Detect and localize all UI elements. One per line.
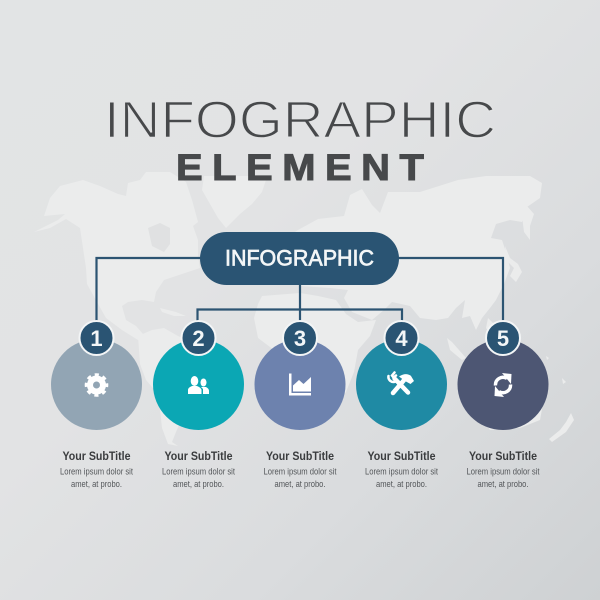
item 3: 3 <box>294 326 306 351</box>
item 5 <box>458 321 548 490</box>
map: Hudson Bay <box>148 223 170 252</box>
item 4 <box>356 321 447 490</box>
item 3: amet, at probo. <box>274 479 326 490</box>
item 4: Your SubTitle <box>368 449 436 463</box>
item 2: Your SubTitle <box>164 449 233 463</box>
connector lines <box>96 258 503 322</box>
icon: refresh <box>494 373 512 397</box>
item 1: 1 <box>90 326 103 351</box>
item 2: 2 <box>192 326 205 351</box>
icon: area chart <box>289 374 311 396</box>
item 1: Your SubTitle <box>62 449 131 463</box>
item 5: Your SubTitle <box>469 449 537 463</box>
heading pill: INFOGRAPHIC <box>225 246 374 270</box>
item 4: Lorem ipsum dolor sit <box>365 466 438 478</box>
item 3 <box>254 321 346 490</box>
item 3: Lorem ipsum dolor sit <box>264 466 337 478</box>
item 2 <box>153 321 244 490</box>
item 5: Lorem ipsum dolor sit <box>466 466 540 478</box>
item 1 <box>51 321 142 490</box>
item 2: Lorem ipsum dolor sit <box>162 466 235 478</box>
title: INFOGRAPHIC <box>104 92 496 150</box>
item 4: 4 <box>395 326 408 351</box>
title: ELEMENT <box>176 147 433 189</box>
item 3: Your SubTitle <box>266 449 334 463</box>
icon: people <box>188 376 209 394</box>
item 5: amet, at probo. <box>478 479 528 490</box>
title <box>104 92 496 189</box>
item 5: 5 <box>497 326 509 351</box>
world map <box>34 172 574 446</box>
item 4: amet, at probo. <box>376 479 427 490</box>
item 1: amet, at probo. <box>71 479 122 490</box>
heading pill <box>200 232 399 285</box>
item 1: Lorem ipsum dolor sit <box>60 466 133 478</box>
item 2: amet, at probo. <box>173 479 224 490</box>
icon: gear <box>86 375 106 395</box>
icon: tools <box>388 372 414 393</box>
